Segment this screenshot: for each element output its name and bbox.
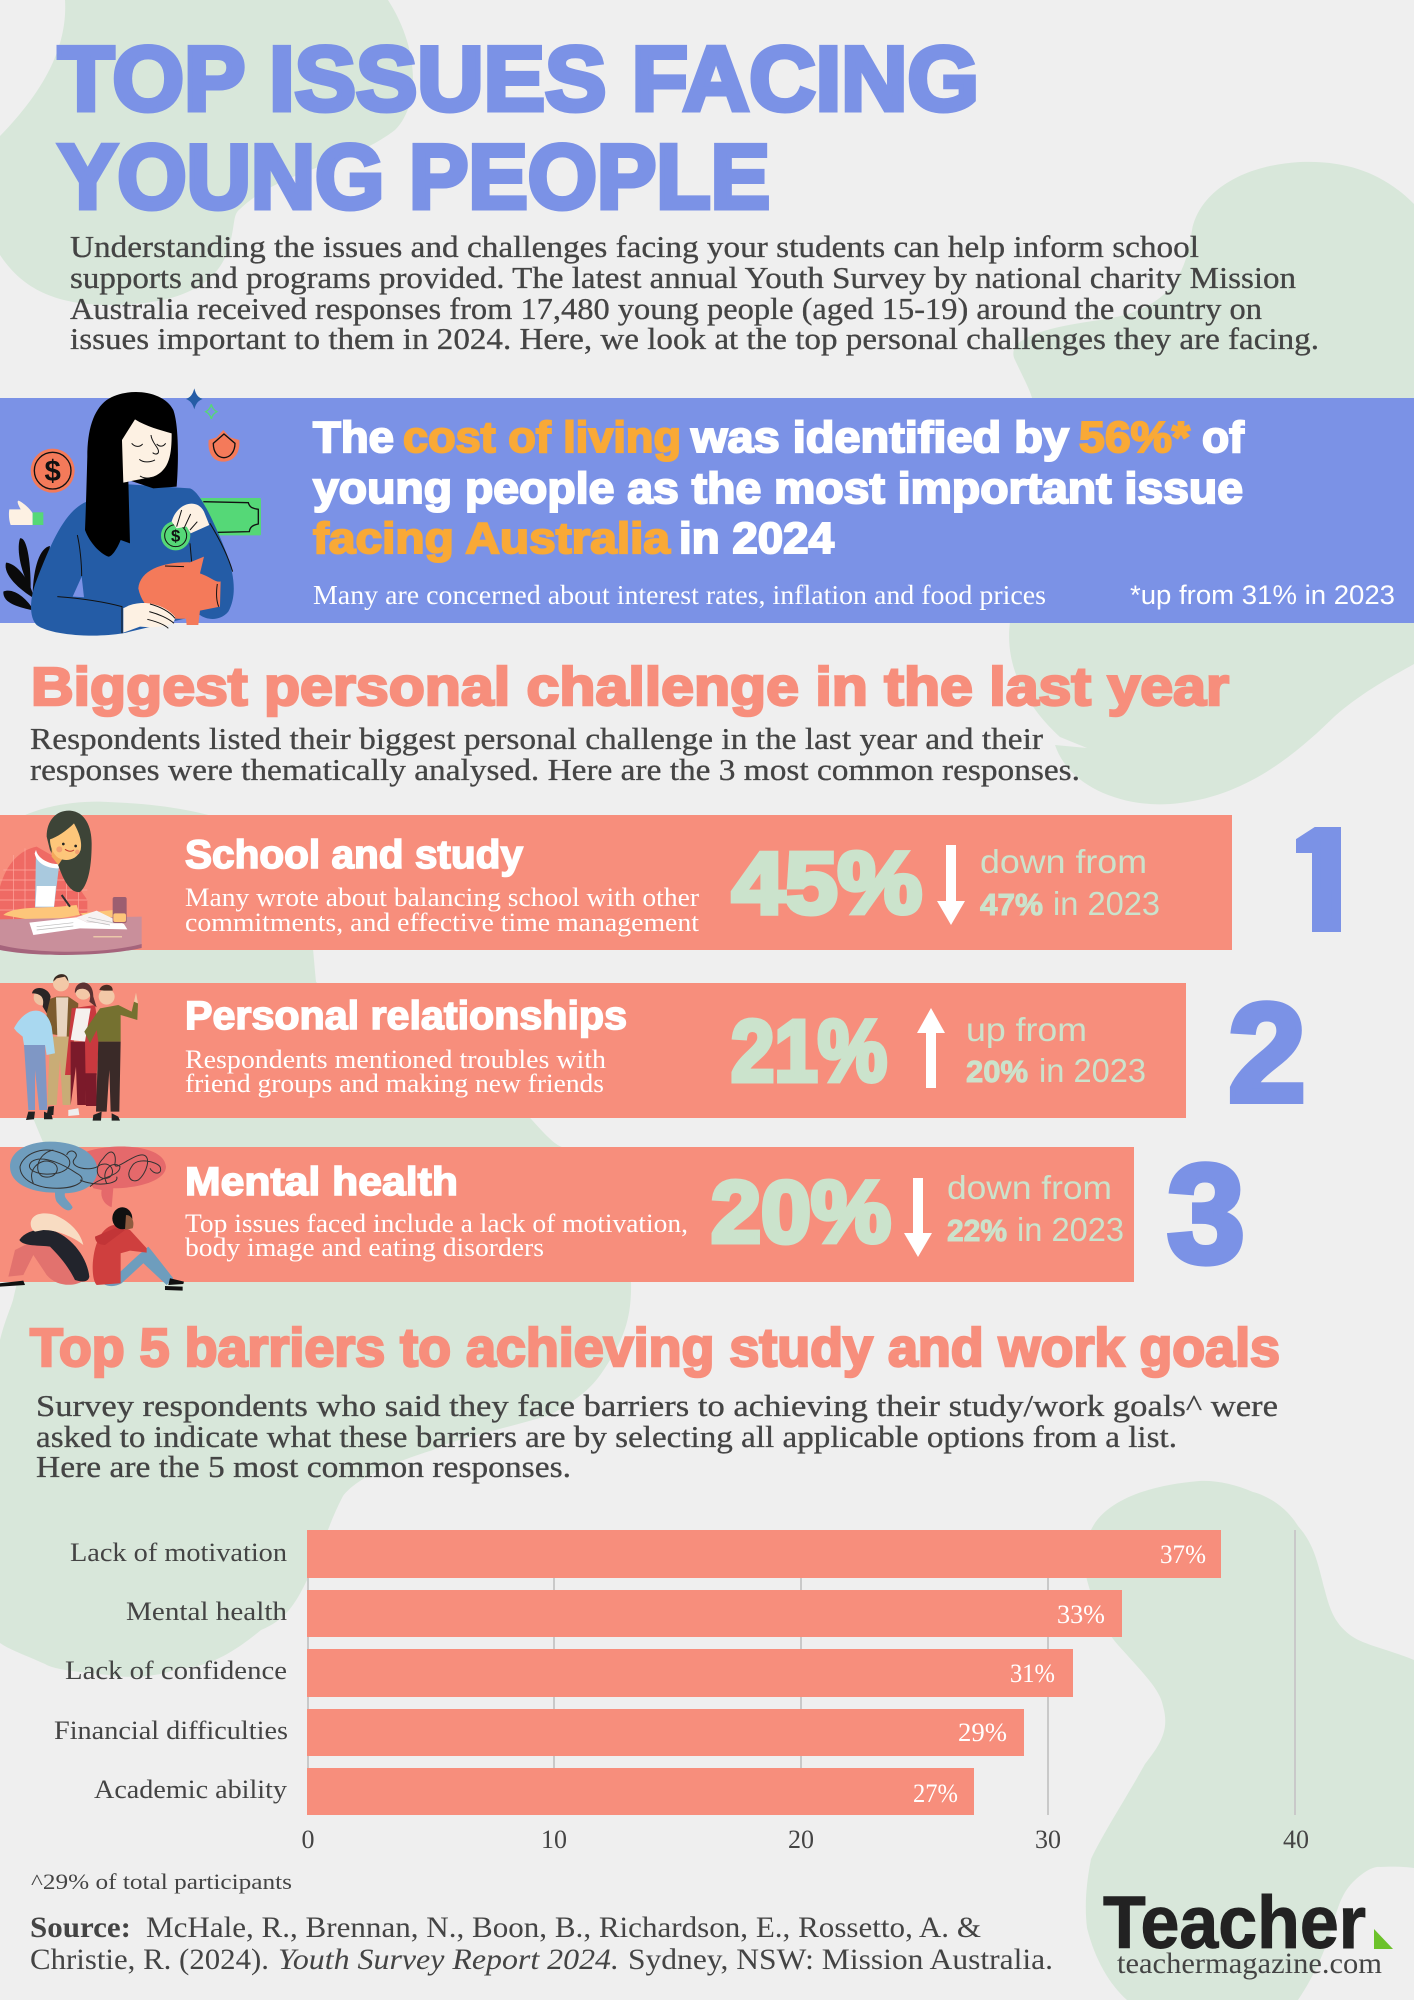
- category labels: Lack of confidence: [65, 1656, 287, 1685]
- panel: rank 1 school and study: [0, 811, 1232, 955]
- text: barriers description: Here are the 5 most common responses.: [36, 1449, 571, 1484]
- row description: commitments, and effective time management: [185, 908, 700, 937]
- value labels: 37%: [1160, 1540, 1206, 1569]
- back man: [47, 997, 78, 1038]
- row description: [185, 1045, 606, 1098]
- axis labels: 0: [302, 1825, 314, 1854]
- row description: friend groups and making new friends: [185, 1069, 604, 1098]
- banner footnote: *up from 31% in 2023: [1130, 580, 1395, 610]
- intro text: Australia received responses from 17,480 young people (aged 15-19) around the country on: [70, 291, 1263, 326]
- panel: rank 2 personal relationships: [0, 974, 1186, 1121]
- woman left: [14, 1011, 55, 1055]
- row description: [185, 1209, 688, 1262]
- banner headline: was identified by: [690, 413, 1070, 462]
- axis labels: 10: [541, 1825, 567, 1854]
- title: YOUNG PEOPLE: [58, 127, 770, 228]
- source citation: McHale, R., Brennan, N., Boon, B., Richardson, E., Rossetto, A. &: [146, 1911, 981, 1944]
- change text: down from: [947, 1169, 1112, 1206]
- change text: in 2023: [1039, 1052, 1146, 1089]
- change text: in 2023: [1017, 1211, 1124, 1248]
- category labels: Financial difficulties: [54, 1716, 288, 1745]
- intro text: supports and programs provided. The latest annual Youth Survey by national charity Mission: [70, 260, 1297, 295]
- rank number 2: 2: [1228, 974, 1306, 1131]
- arrow down: [904, 1178, 932, 1257]
- source citation: [30, 1911, 1053, 1976]
- banner headline: 56%*: [1079, 413, 1191, 462]
- heading: top 5 barriers: Top 5 barriers to achieving study and work goals: [30, 1318, 1280, 1378]
- change text: down from: [980, 843, 1147, 880]
- row description: [185, 883, 700, 937]
- stat 20%: 20%: [711, 1164, 891, 1261]
- banner headline: young people as the most important issue: [313, 464, 1243, 513]
- axis labels: 30: [1035, 1825, 1061, 1854]
- heading: biggest personal challenge: Biggest personal challenge in the last year: [31, 657, 1229, 717]
- change text: [980, 843, 1160, 922]
- row description: Respondents mentioned troubles with: [185, 1045, 606, 1074]
- man right: [84, 1002, 138, 1043]
- banner subtext: Many are concerned about interest rates, inflation and food prices: [313, 580, 1046, 610]
- source citation: Sydney, NSW: Mission Australia.: [628, 1943, 1053, 1976]
- row title: Mental health: [185, 1160, 458, 1204]
- text: challenge description: [30, 721, 1080, 787]
- category labels: Lack of motivation: [70, 1538, 287, 1567]
- category labels: Academic ability: [94, 1775, 287, 1804]
- value labels: [913, 1540, 1206, 1808]
- icon: woman with piggy bank: $: [171, 527, 181, 546]
- text: barriers description: [36, 1388, 1278, 1484]
- axis labels: 40: [1283, 1825, 1309, 1854]
- rank number 3: 3: [1167, 1135, 1245, 1292]
- text: barriers description: asked to indicate what these barriers are by selecting all applicable options from a list.: [36, 1419, 1177, 1454]
- panel: rank 3 mental health: [0, 1142, 1134, 1291]
- bar chart: barriers: [54, 1530, 1309, 1854]
- axis labels: [302, 1825, 1309, 1854]
- rank number 1: 1: [1282, 799, 1364, 962]
- category labels: Mental health: [126, 1597, 287, 1626]
- value labels: 27%: [913, 1779, 958, 1808]
- change text: up from: [966, 1011, 1087, 1048]
- banner headline: facing Australia: [313, 514, 671, 563]
- category labels: [54, 1538, 288, 1804]
- banner headline: The: [313, 413, 394, 462]
- stat 21%: 21%: [731, 1003, 887, 1100]
- row description: Many wrote about balancing school with other: [185, 883, 699, 912]
- arrow down: [937, 845, 965, 925]
- intro text: [70, 229, 1319, 356]
- change text: 20%: [966, 1054, 1028, 1089]
- title: [58, 29, 979, 228]
- banner headline: of: [1202, 413, 1244, 462]
- value labels: 33%: [1057, 1600, 1105, 1629]
- icon: woman with piggy bank: [3, 388, 261, 636]
- value labels: 29%: [958, 1718, 1007, 1747]
- change text: [947, 1169, 1124, 1248]
- intro text: issues important to them in 2024. Here, we look at the top personal challenges they are facing.: [70, 321, 1319, 356]
- banner headline: [313, 413, 1244, 563]
- footnote: ^29% of total participants: [31, 1869, 292, 1894]
- logo: Teacher magazine: teachermagazine.com: [1117, 1947, 1382, 1980]
- intro text: Understanding the issues and challenges facing your students can help inform school: [70, 229, 1199, 264]
- change text: 47%: [980, 887, 1043, 922]
- row description: Top issues faced include a lack of motivation,: [185, 1209, 688, 1238]
- axis labels: 20: [788, 1825, 814, 1854]
- row title: School and study: [185, 833, 524, 877]
- banner headline: cost of living: [403, 413, 681, 462]
- woman 2: [65, 1005, 99, 1075]
- text: challenge description: responses were thematically analysed. Here are the 3 most common responses.: [30, 752, 1080, 787]
- text: challenge description: Respondents listed their biggest personal challenge in the last year and their: [30, 721, 1044, 756]
- row title: Personal relationships: [185, 994, 627, 1038]
- title: TOP ISSUES FACING: [58, 29, 979, 130]
- icon: student studying: [0, 811, 142, 955]
- panel: cost of living banner: [0, 388, 1414, 636]
- source citation: Source:: [30, 1911, 131, 1944]
- change text: in 2023: [1053, 885, 1160, 922]
- text: barriers description: Survey respondents who said they face barriers to achieving their study/work goals^ were: [36, 1388, 1278, 1423]
- value labels: 31%: [1010, 1659, 1055, 1688]
- source citation: Christie, R. (2024).: [30, 1943, 269, 1976]
- icon: group of friends: [14, 974, 138, 1121]
- change text: 22%: [947, 1213, 1007, 1248]
- row description: body image and eating disorders: [185, 1233, 544, 1262]
- icon: two sitting people with thought bubbles: [0, 1142, 184, 1291]
- banner headline: in 2024: [679, 514, 835, 563]
- change text: [966, 1011, 1146, 1089]
- icon: woman with piggy bank: $: [45, 455, 61, 488]
- arrow up: [917, 1008, 945, 1088]
- logo: Teacher magazine: Teacher: [1103, 1881, 1366, 1964]
- stat 45%: 45%: [732, 835, 922, 932]
- source citation: Youth Survey Report 2024.: [278, 1943, 619, 1976]
